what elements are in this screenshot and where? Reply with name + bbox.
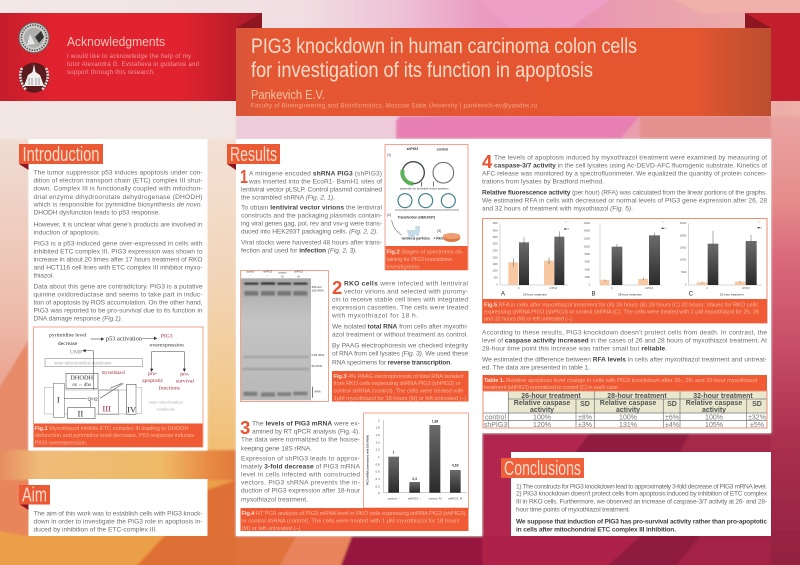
right ribbon [745,13,800,101]
figure 1: mechanism diagram [34,327,203,447]
chart A: 26-hour treatment [492,222,569,298]
introduction text: thiazol. [34,272,54,279]
chart A: 26-hour treatment: 2000 [492,257,498,259]
conclusions heading: Conclusions [504,458,581,480]
figure 1: mechanism diagram: pro- [148,371,157,377]
step 2 text: RKO cells were infected with lentiviral [344,280,469,287]
step 1 text: constructs and the packaging plasmids contain- [241,212,382,219]
results discussion text: According to these results, PIG3 knockdown doesn't protect cells from death. In contrast, the [482,329,767,336]
affiliation: Faculty of Bioengineering and Bioinformatics, Moscow State University | pankevich-ev@yandex.ru [251,104,537,110]
figure 1: mechanism diagram: UMP [70,350,82,356]
chart B: 28-hour treatment: M [665,228,667,230]
table 1: Relative caspase [600,400,656,407]
figure 4: bar chart: control, – [388,497,400,501]
figure 4: bar chart: 1,88 [432,419,438,423]
step 1 text: Viral stocks were harvested 48 hours after trans- [241,239,382,246]
table 1: 100% [619,414,637,421]
icon: university logo [19,63,49,93]
figure 4 caption [240,508,468,532]
step 1 text: was inserted into the EcoR1- BamH1 sites of [248,178,382,185]
figure 3 caption [332,371,468,402]
figure 3: RNA gel: shPIG3 [263,270,273,274]
step 3 text: level in cells infected with constructed [241,471,360,478]
figure 3: RNA gel: control [278,270,287,274]
chart A: 26-hour treatment: A [501,292,505,298]
conclusions text: in cells after mitochondrial ETC complex III inhibition. [516,526,676,533]
chart C: 32-hour treatment: C [689,292,694,298]
conclusions text: 2) PIG3 knockdown doesn't protect cells from apoptosis induced by inhibition of ETC complex [516,490,768,498]
step 4 text: trations from lysates by Bradford method. [482,178,604,185]
chart C: 32-hour treatment: 25000 [680,223,687,225]
step 1 text: 1 [240,166,248,187]
results discussion text: level of caspase activity increased in the cases of 26 and 28 hours of myxothiazol treatment. At [482,337,767,344]
results heading: Results [230,144,277,166]
chart C: 32-hour treatment: shPIG3 [742,288,750,290]
step 2 text: expression cassettes. The cells were treated [332,304,468,311]
chart C: 32-hour treatment: M [760,227,762,229]
introduction heading [19,144,103,170]
figure 3: RNA gel: shPIG3 [294,270,304,274]
table 1: 131% [619,422,637,429]
chart B: 28-hour treatment: 4000 [585,269,591,271]
figure 4: bar chart: control, M [428,497,442,501]
introduction text: down. Complex III is functionally coupled with mitochon- [34,185,202,192]
table 1: ±4% [665,422,679,429]
step 3 text: The levels of PIG3 mRNA were ex- [252,420,360,427]
figure 1: mechanism diagram: ox ⇔ dho [72,383,92,388]
conclusions text [516,483,768,533]
figure 3: RNA gel: – [267,275,269,278]
title: PIG3 knockdown in human carcinoma colon cells [251,34,637,58]
introduction text [32,169,203,322]
figure 4: bar chart: PIG3 mRNA (normalized with 18S rRNA) [366,435,370,485]
figure 3 caption: 1μM myxothiazol for 18 hours (M) or left untreated (–) [334,396,467,402]
figure 2: lentiviral workflow: plasmids for lentiviral vector systems [400,186,449,190]
table 1: ±32% [748,414,766,421]
conclusions text: III in RKO cells. Furthermore, we observed an increase of caspase-3/7 activity at 26- and 28- [516,498,767,505]
figure 1 caption: PIG3 overexpression. [34,440,88,446]
step 2 text: vector virions and selected with puromy- [344,288,468,295]
figure 2 caption: investigation [386,264,420,270]
chart C: 32-hour treatment: 5000 [681,272,687,274]
table 1: 100% [533,414,551,421]
figure 1: mechanism diagram: myxothiazol [102,371,126,376]
figure 3: RNA gel: M [281,274,283,278]
figure 2: lentiviral workflow: control [437,147,448,151]
chart B: 28-hour treatment: 14000 [584,231,591,233]
figure 4: bar chart: shPIG3, – [408,497,422,501]
conclusions text: 1) The constructs for PIG3 knockdown lead to approximately 3-fold decrease of PIG3 mRNA level. [516,483,767,490]
figure 1 caption [34,424,202,447]
introduction text: tion of apoptosis by ROS accumulation. On the other hand, [34,299,203,306]
chart B: 28-hour treatment: 8000 [585,254,591,256]
figure 5: three bar charts [482,218,767,323]
acknowledgments heading: Acknowledgments [67,35,165,49]
figure 2 caption: Fig.2 Stages of specimens ob- [386,250,464,256]
figure 3 caption: control shRNA (control). The cells were treated with [334,388,464,394]
results discussion text: 28-hour time point this increase was rather small but reliable. [482,345,667,352]
panel: aim [19,479,208,536]
figure 3: RNA gel: control [246,270,255,274]
figure 4: bar chart: 0 [378,491,380,495]
table 1: activity [616,407,640,414]
table 1: Relative caspase [686,400,742,407]
figure 1: mechanism diagram: overexpression [150,342,184,348]
table 1: activity [702,407,726,414]
step 3 text: The data were normalized to the house- [241,436,360,443]
table 1: ±8% [578,414,592,421]
step 1 text: fection and used for infection (Fig. 2, 3). [241,247,357,254]
introduction text: increase in about 20 times after 17 hours treatment of RKO [34,256,202,263]
figure 4: bar chart: 0,4 [376,477,380,481]
chart A: 26-hour treatment: 500 [494,278,498,280]
table 1: ±6% [665,414,679,421]
chart B: 28-hour treatment: 16000 [584,223,591,225]
table 1: control [485,414,506,421]
table 1: shPIG3 [484,422,507,429]
figure 1: mechanism diagram: functions [159,384,180,391]
figure 1: mechanism diagram: inner mitochondrial [149,399,184,404]
step 3 text: vectors. PIG3 shRNA prevents the in- [241,479,360,486]
figure 2: lentiviral workflow: shPIG3 [407,147,418,151]
figure 4: bar chart: shPIG3, M [448,497,463,501]
step 2 text: with myxothiazol for 18 h. [331,312,418,319]
figure 3: RNA gel: 5S rRNA [312,364,322,368]
figure 2: lentiviral workflow: lentiviral particles [402,236,430,240]
figure 2: lentiviral workflow: + RKO infection [433,236,458,240]
figure 5 caption: expressing shRNA PIG3 (shPIG3) or control shRNA (C). The cells were treated with 1 μM myxothiazol for 26, 28 [484,310,759,316]
introduction text: Data about this gene are contradictory. PIG3 is a putative [34,283,203,290]
figure 4: bar chart: 2 [378,418,380,422]
chart A: 26-hour treatment: 26-hour treatment [523,292,547,296]
figure 1: mechanism diagram: DHODH [70,374,94,381]
acknowledgments ribbon [0,13,262,101]
figure 5 caption: and 32 hours (M) or left untreated (–) [484,316,572,322]
table 1: 26-hour treatment [521,393,581,400]
introduction text: PIG3 was reported to be pro-survival due to its function in [34,307,203,314]
table 1: ±3% [578,422,592,429]
aim text: down in order to investigate the PIG3 role in apoptosis in- [34,518,202,525]
acknowledgments text: tutor Alexandra G. Evstafieva in guidance and [67,62,199,68]
table 1: 32-hour treatment [693,393,753,400]
chart C: 32-hour treatment: 0 [685,285,687,287]
figure 1: mechanism diagram: survival [176,378,195,384]
figure 3: RNA gel: M [298,274,300,278]
figure 5 caption [482,299,767,323]
figure 4: bar chart: 1,8 [376,426,380,430]
step 4 text: and 32 hours of treatment with myxothiazol (Fig. 5). [482,205,633,212]
table 1: 120% [533,422,551,429]
chart B: 28-hour treatment: 12000 [584,239,591,241]
introduction text: and HCT116 cell lines with ETC complex III inhibitor myxo- [34,264,202,271]
figure 1: mechanism diagram: pyrimidine level [49,333,87,339]
figure 4: bar chart: 1 [393,450,395,454]
introduction text: The tumor suppressor p53 induces apoptosis under con- [34,169,202,176]
figure 1 caption: Fig.1 Myxothiazol inhibits ETC complex III leading to DHODH [34,426,188,432]
introduction text: DNA damage response (Fig.1). [34,315,123,322]
figure 1: mechanism diagram: pro- [180,372,190,378]
step 2 text: RNA specimens for reverse transcription. [332,359,452,366]
step 2 text: 2 [332,277,342,298]
figure 5 caption: Fig.5 RFA in cells after myxothiazol treatment for (A) 26 hours (B) 28 hours (C) 32 hours. Values for RKO cells [484,302,758,308]
introduction text: dition of electron transport chain (ETC) complex III shut- [34,177,202,184]
panel: introduction [19,139,208,450]
chart C: 32-hour treatment: 32-hour treatment [720,292,744,296]
table 1: SD [667,401,677,408]
introduction heading: Introduction [22,144,100,166]
table 1: 28-hour treatment [607,393,667,400]
figure 3 caption: Fig.3 4% PAAG electrophoresis of total RNA isolated [334,374,464,380]
results discussion text [482,329,767,371]
figure 4: bar chart: 0,3 [412,477,417,481]
figure 1: mechanism diagram: membrane [157,407,175,412]
figure 3: RNA gel [240,270,328,402]
table 1: Relative caspase [514,400,570,407]
chart A: 26-hour treatment: 1500 [492,264,498,266]
figure 1: mechanism diagram: IV [127,405,137,415]
step 3 text: keeping gene 18S rRNA. [241,445,312,452]
figure 1: mechanism diagram: p53 activation [106,336,143,343]
panel: results [227,139,771,536]
chart B: 28-hour treatment: 0 [589,285,591,287]
chart A: 26-hour treatment: 1000 [492,271,498,273]
acknowledgments text: support through this research. [67,70,155,76]
step 1 text: A minigene encoded shRNA PIG3 (shPIG3) [249,170,382,177]
figure 1: mechanism diagram: III [102,403,111,413]
chart B: 28-hour treatment: shPIG3 [645,288,654,290]
introduction text: drial enzyme dihydroorotate dehydrogenase (DHODH) [34,194,202,201]
figure 4 caption: or control shRNA (control). The cells were treated with 1 μM myxothiazol for 18 hours [242,518,460,524]
acknowledgments text: I would like to acknowledge the help of my [67,54,191,60]
table 1: ±5% [750,422,764,429]
aim text: duced by inhibition of the ETC-complex III. [34,526,157,533]
step 2 text: of RNA from cell lysates (Fig. 3). We used these [332,350,468,357]
figure 3 caption: from RKO cells expressing shRNA PIG3 (shPIG3) or [334,381,461,387]
figure 1: mechanism diagram: QH2 [88,397,98,403]
author: Pankevich E.V. [251,87,325,102]
figure 4: bar chart: 0,8 [376,462,380,466]
step 1 text [240,166,383,254]
step 2 text: By PAAG electrophoresis we checked integrity [332,342,469,349]
table 1 caption: treatment (shPIG3) normalized to control (C) in each case [484,385,618,391]
chart B: 28-hour treatment: 6000 [585,262,591,264]
figure 4 caption: (M) or left untreated (–) [242,526,301,532]
chart A: 26-hour treatment: 0 [496,285,498,287]
figure 1 caption: disfunction and pyrimidine level decrease. P53 response induces [34,433,194,439]
figure 1: mechanism diagram: I [57,395,60,405]
figure 4: bar chart: 1,4 [376,440,380,444]
figure 3: RNA gel: 5.8S rRNA [312,353,325,357]
table 1: SD [580,401,590,408]
step 4 text: 4 [482,151,493,172]
step 3 text: duction of PIG3 expression after 18-hour [241,487,361,494]
figure 2: lentiviral workflow [385,144,468,270]
figure 4: bar chart: 0,63 [452,464,459,468]
figure 2: lentiviral workflow: (3) [437,229,441,233]
figure 2: lentiviral workflow: Transfection (HEK293T) [398,215,435,219]
introduction text: However, it is unclear what gene's products are involved in [34,221,203,228]
conclusions text: We suppose that induction of PIG3 has pro-survival activity rather than pro-apoptotic [516,518,767,525]
title [251,34,637,82]
chart B: 28-hour treatment: 10000 [584,246,591,248]
aim heading [19,484,50,510]
table 1 caption: Table 1. Relative apoptosis level change in cells with PIG3 knockdown after 26-, 28- and 32-hour myxothiazol [484,378,757,384]
step 1 text: duced into HEK293T packaging cells. (Fig. 2, 2). [241,228,378,235]
aim text: The aim of this work was to establish cells with PIG3 knock- [34,510,202,517]
step 3 text [240,417,361,503]
chart B: 28-hour treatment [584,222,667,298]
step 4 text: Relative fluorescence activity (per hour) (RFA) was calculated from the linear portions of the graphs. [482,189,767,196]
figure 3: RNA gel: – [250,275,252,278]
step 4 text [482,151,767,212]
step 2 text: azol treatment or without treatment as control. [332,331,468,338]
chart C: 32-hour treatment: 20000 [680,235,687,237]
step 4 text: AFC release was monitored by a spectrofluorimeter. We equalized the quantity of protein concen- [482,170,767,177]
figure 1: mechanism diagram: PIG3 [161,334,173,340]
conclusions text: hour time points of myxothiazol treatment. [516,506,630,513]
step 4 text: We estimated RFA in cells with decreased or normal levels of PIG3 gene expression after 26, 28 [482,197,767,204]
chart C: 32-hour treatment [680,222,762,298]
step 1 text: ing viral genes gag, pol, rev and vsv-g were trans- [241,220,382,227]
introduction text: PIG3 is a p53-induced gene over-expressed in cells with [34,240,203,247]
step 4 text: The levels of apoptosis induced by myxothiazol treatment were examined by measuring of [494,154,767,161]
figure 3: RNA gel: 18S rRNA [312,288,324,292]
aim heading: Aim [22,484,47,506]
results discussion text: We estimated the difference between RFA levels in cells after myxothiazol treatment and untreat- [482,356,767,363]
introduction text: quinine oxidoreductase and seems to take part in induc- [34,291,202,298]
step 3 text: amined by RT qPCR analysis (Fig. 4). [252,428,360,435]
step 3 text: Expression of shPIG3 leads to approx- [241,455,360,462]
chart A: 26-hour treatment: 3000 [492,244,498,246]
chart B: 28-hour treatment: 28-hour treatment [618,292,642,296]
step 1 text: lentiviral vector pLSLP. Control plasmid contained [241,186,382,193]
figure 2 caption: taining for PIG3 knockdown [386,257,452,263]
figure 1: mechanism diagram: decrease [58,341,78,347]
chart A: 26-hour treatment: 4000 [492,230,498,232]
introduction text: which is responsible for pyrimidine biosynthesis de novo. [32,202,203,208]
figure 4: bar chart: 1,6 [376,433,380,437]
table 1: 100% [705,414,723,421]
chart A: 26-hour treatment: C [518,288,520,290]
chart C: 32-hour treatment: C [706,288,708,290]
chart B: 28-hour treatment: C [611,288,613,290]
figure 4: bar chart: 0,6 [376,470,380,474]
chart B: 28-hour treatment: 2000 [585,277,591,279]
chart C: 32-hour treatment: 15000 [680,247,687,249]
table 1 caption [482,375,767,391]
table 1: SD [752,401,762,408]
step 3 text: imately 3-fold decrease of PIG3 mRNA [241,463,361,470]
results discussion text: ed. The data are presented in table 1. [482,364,590,371]
chart A: 26-hour treatment: 2500 [492,251,498,253]
title banner [236,28,771,116]
results heading [227,144,280,170]
step 2 text: We isolated total RNA from cells after myxothi- [332,323,468,330]
figure 2 caption [386,246,468,270]
figure 3: RNA gel: tRNA [314,390,321,394]
chart A: 26-hour treatment: 4500 [492,223,498,225]
step 3 text: myxothiazol treatment. [241,496,308,503]
step 2 text [331,277,469,366]
figure 4 caption: Fig.4 RT PCR analysis of PIG3 mRNA level in RKO cells expressing shRNA PIG3 (shPIG3) [242,511,466,517]
table 1 [483,391,767,429]
step 2 text: cin to receive stable cell lines with integrated [332,296,468,303]
figure 4: bar chart: 1 [378,455,380,459]
chart C: 32-hour treatment: 10000 [680,260,687,262]
figure 1: mechanism diagram: II [77,409,83,419]
figure 1: mechanism diagram: apoptotic [142,378,164,384]
figure 3: RNA gel: 28S and [312,285,322,289]
step 1 text: the scrambled shRNA (Fig. 2, 1). [241,194,335,201]
step 4 text: caspase-3/7 activity in the cell lysates using Ac-DEVD-AFC fluorogenic substrate. Kinetics of [494,162,767,169]
chart B: 28-hour treatment: B [592,292,596,298]
figure 2: lentiviral workflow: (1) [387,153,391,157]
acknowledgments text [67,54,199,76]
figure 4: bar chart: 0,2 [376,484,380,488]
table 1: 105% [705,422,723,429]
step 1 text: To obtain lentiviral vector virions the lentiviral [241,204,383,211]
icon: institute logo [19,23,49,53]
step 3 text: 3 [240,417,250,438]
chart A: 26-hour treatment: M [567,229,569,231]
introduction text: induction of apoptosis. [34,229,100,236]
introduction text: inhibited ETC complex III. PIG3 expression was shown to [34,248,203,255]
table 1: activity [530,407,554,414]
figure 4: bar chart [364,413,468,508]
panel: conclusions [501,452,771,536]
chart A: 26-hour treatment: shPIG3 [549,288,558,290]
figure 2: lentiviral workflow: (2) [387,213,391,217]
figure 4: bar chart: 1,2 [376,448,380,452]
title: for investigation of its function in apoptosis [251,58,593,82]
chart A: 26-hour treatment: 3500 [492,237,498,239]
introduction text: DHODH dysfunction leads to p53 response. [34,210,160,216]
figure 1: mechanism diagram: outer mitochondrial membrane [54,361,112,366]
aim text [34,510,202,533]
